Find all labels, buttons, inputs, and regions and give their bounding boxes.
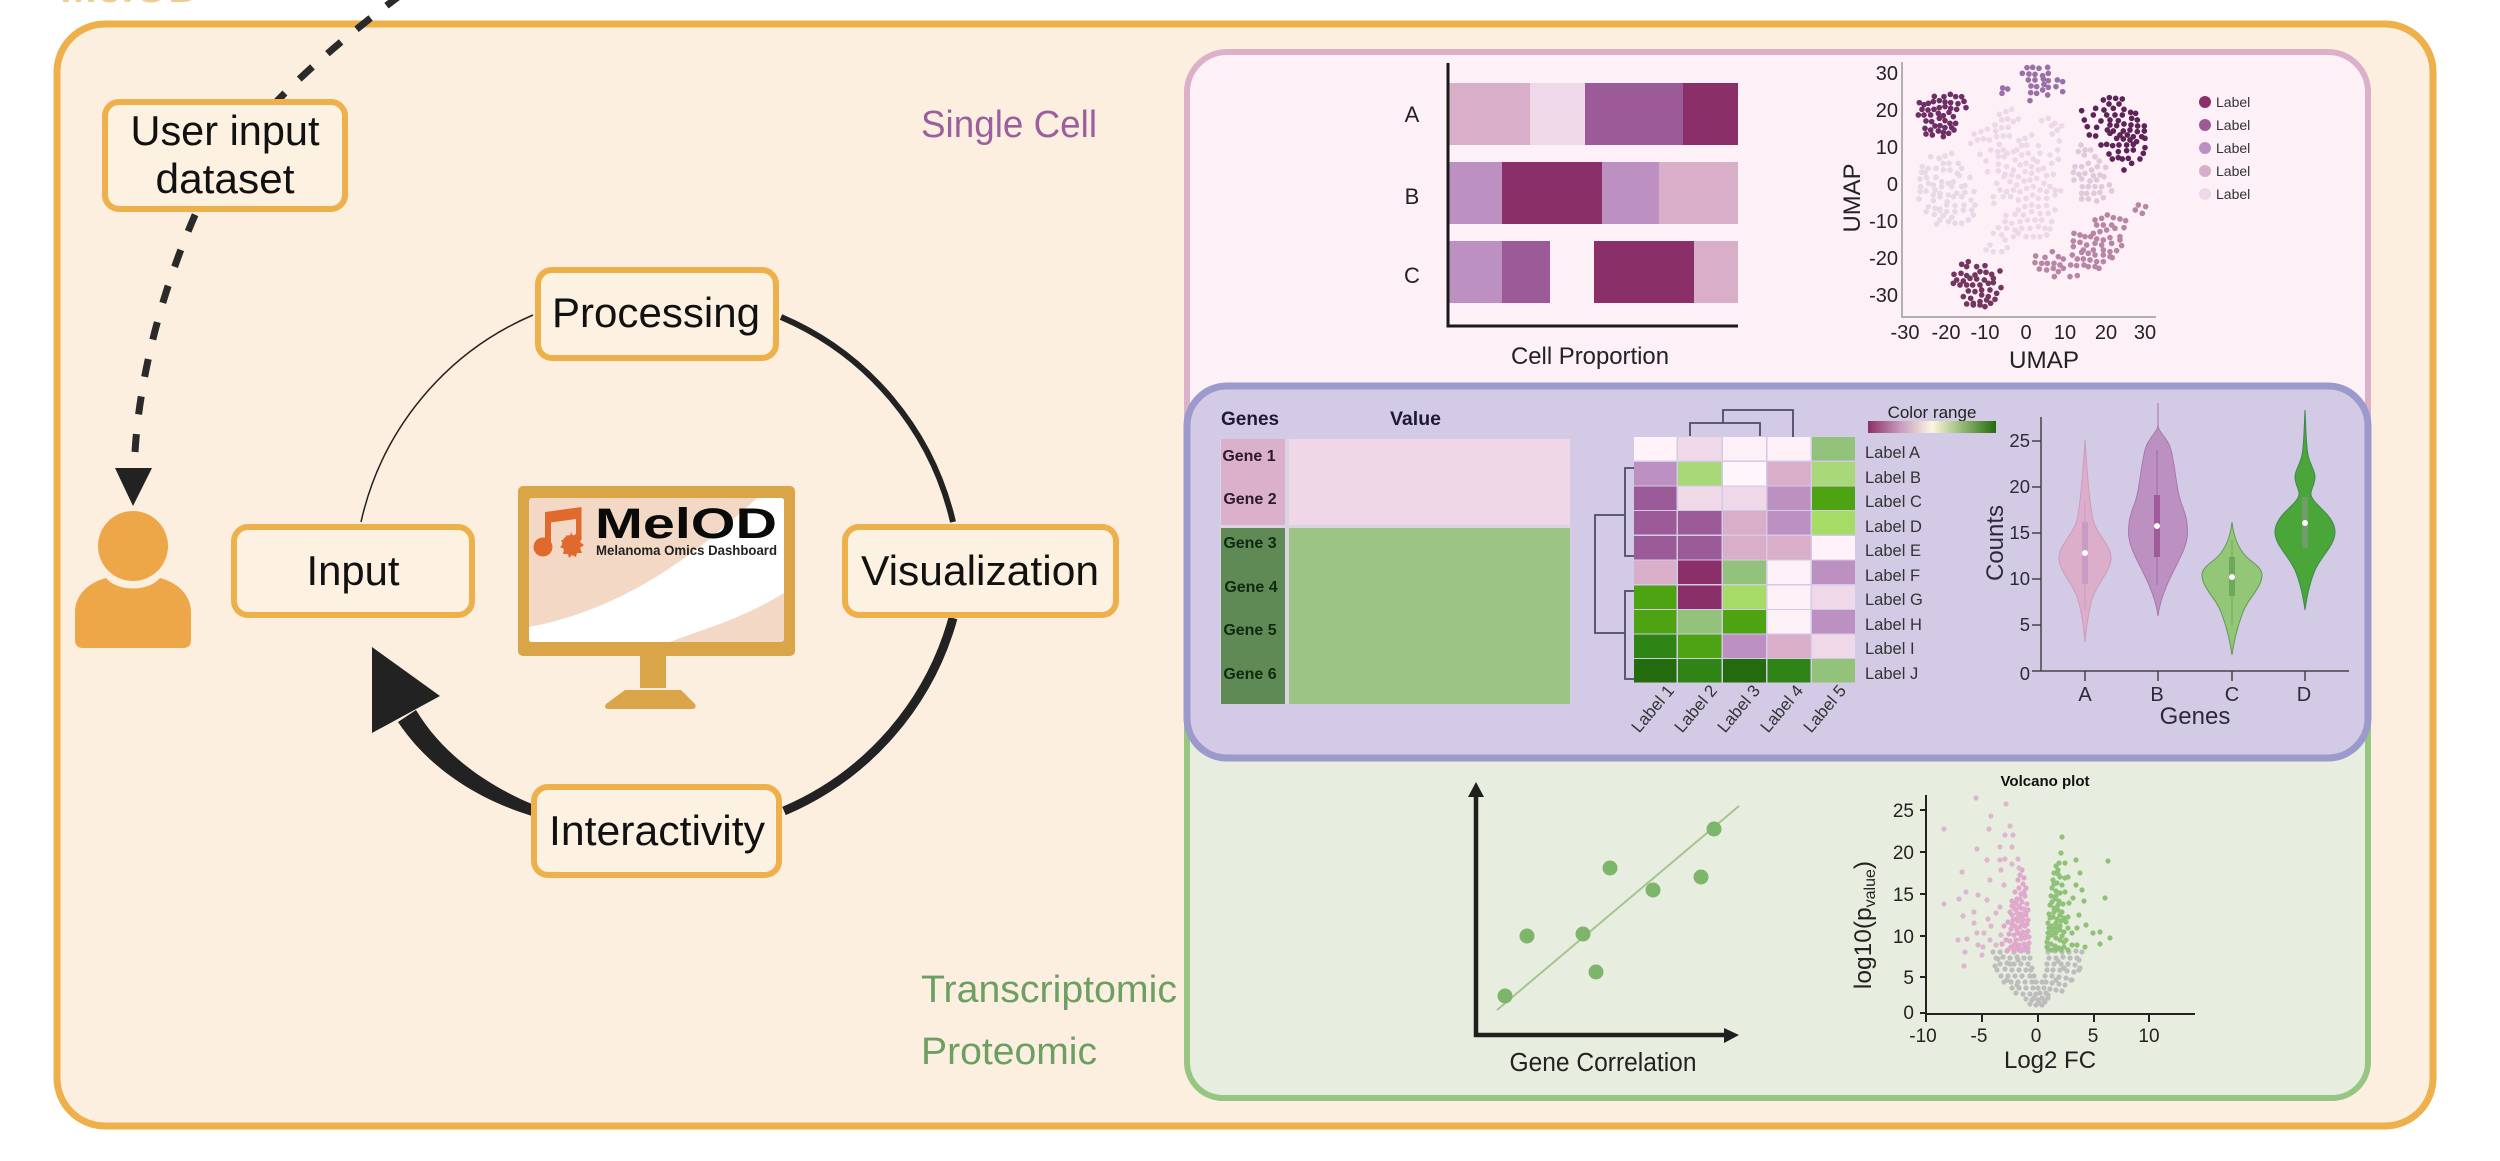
heatmap: column labels: Label 4 — [1757, 681, 1807, 736]
chart: UMAP scatter: -20 — [1932, 322, 1960, 344]
chart: violin plot — [1982, 403, 2349, 730]
heatmap: column labels: Label 3 — [1714, 681, 1764, 736]
chart: UMAP scatter: 20 — [2095, 322, 2117, 344]
heatmap: row labels: Label D — [1865, 518, 1922, 536]
legend: UMAP clusters: Label — [2216, 117, 2250, 133]
panel: single cell — [1187, 52, 2368, 492]
box: input: Input — [306, 547, 400, 594]
chart: volcano plot: Volcano plot — [2000, 773, 2090, 790]
chart: violin plot: 10 — [2009, 568, 2030, 589]
chart: UMAP scatter: -20 — [1869, 248, 1898, 270]
arrow: dashed data path to user — [115, 0, 402, 506]
heatmap: row labels: Label C — [1865, 493, 1922, 511]
box: processing — [538, 270, 776, 358]
heatmap: dendrograms — [1595, 410, 1793, 679]
chart: volcano plot: Log2 FC — [2004, 1047, 2096, 1074]
chart: UMAP scatter: 20 — [1876, 100, 1898, 122]
violin: D — [2275, 410, 2335, 610]
heatmap: column labels: Label 2 — [1671, 681, 1721, 736]
heatmap: row labels: Label F — [1865, 567, 1920, 585]
box: interactivity: Interactivity — [549, 807, 765, 854]
arrow: cycle back to input — [372, 647, 532, 816]
box: visualization — [845, 527, 1116, 615]
chart: volcano plot: 0 — [2031, 1026, 2041, 1047]
chart: UMAP scatter: -10 — [1869, 211, 1898, 233]
legend: UMAP clusters: Label — [2216, 140, 2250, 156]
chart: violin plot: 0 — [2020, 663, 2030, 684]
chart: violin plot: 15 — [2009, 522, 2030, 543]
table: genes and values: Gene 4 — [1224, 579, 1278, 596]
panel: transcriptomic proteomic — [1187, 600, 2368, 1098]
box: visualization: Visualization — [861, 547, 1099, 594]
box: processing: Processing — [552, 289, 760, 336]
heading: proteomic: Proteomic — [921, 1031, 1097, 1073]
table: genes and values — [1220, 408, 1570, 704]
legend: color range: Color range — [1888, 403, 1976, 422]
chart: UMAP scatter: UMAP — [2009, 347, 2079, 374]
violin: A — [2059, 440, 2111, 642]
chart: violin plot: Counts — [1982, 505, 2009, 581]
heatmap: column labels — [1628, 681, 1850, 736]
stacked bar chart: cell proportion: Cell Proportion — [1511, 343, 1669, 370]
chart: volcano plot: log10(p — [1850, 907, 1877, 989]
chart: violin plot: A — [2078, 684, 2092, 706]
box: user input dataset: dataset — [156, 155, 295, 202]
chart: volcano plot: 25 — [1893, 801, 1914, 822]
chart: volcano plot: value — [1862, 869, 1879, 907]
table: genes and values: Genes — [1221, 409, 1279, 430]
table: genes and values: Gene 2 — [1223, 491, 1277, 508]
heatmap: row labels: Label H — [1865, 616, 1922, 634]
chart: gene correlation — [1468, 782, 1739, 1077]
chart: UMAP scatter: 30 — [1876, 63, 1898, 85]
chart: violin plot: B — [2150, 684, 2164, 706]
chart: UMAP scatter — [1839, 62, 2250, 374]
chart: clustered heatmap — [1595, 403, 1996, 736]
chart: volcano plot: 20 — [1893, 843, 1914, 864]
table: genes and values: Value — [1390, 408, 1441, 430]
box: input — [234, 527, 472, 615]
chart: volcano plot: 10 — [1893, 927, 1914, 948]
chart: UMAP scatter: 30 — [2134, 322, 2156, 344]
cycle arcs — [361, 315, 953, 811]
icon: monitor with MelOD logo — [518, 486, 795, 709]
logo: wordmark: MelOD — [595, 500, 777, 548]
chart: volcano plot: 0 — [1903, 1003, 1914, 1024]
legend: color range — [1868, 403, 1996, 433]
chart: volcano plot: -10 — [1909, 1026, 1937, 1047]
chart: volcano plot: ) — [1850, 861, 1877, 869]
violin: C — [2202, 522, 2262, 655]
heatmap: row labels: Label B — [1865, 469, 1921, 487]
stacked bar chart: cell proportion: C — [1404, 263, 1420, 288]
legend: UMAP clusters: Label — [2216, 186, 2250, 202]
chart: UMAP scatter: 0 — [1887, 174, 1898, 196]
table: genes and values: Gene 5 — [1223, 622, 1277, 639]
box: user input dataset: User input — [130, 107, 320, 154]
chart: violin plot: D — [2297, 684, 2311, 706]
logo: music note — [534, 507, 584, 558]
chart: UMAP scatter: 10 — [1876, 137, 1898, 159]
violin: B — [2128, 403, 2188, 616]
chart: UMAP scatter: UMAP — [1839, 164, 1866, 232]
chart: volcano plot: 5 — [1903, 968, 1914, 989]
heading: transcriptomic: Transcriptomic — [921, 969, 1177, 1011]
chart: UMAP scatter: -30 — [1891, 322, 1919, 344]
chart: UMAP scatter: -30 — [1869, 285, 1898, 307]
heatmap: row labels: Label I — [1865, 640, 1915, 658]
chart: volcano plot: 5 — [2088, 1026, 2098, 1047]
chart: UMAP scatter: -10 — [1971, 322, 1999, 344]
icon: user — [75, 511, 191, 648]
chart: volcano plot: 10 — [2138, 1026, 2160, 1047]
heading: single cell: Single Cell — [921, 104, 1097, 146]
box: interactivity — [534, 787, 779, 875]
heatmap: row labels: Label G — [1865, 591, 1923, 609]
table: genes and values: Gene 1 — [1222, 448, 1276, 465]
heatmap: row labels — [1865, 444, 1923, 683]
heatmap: column labels: Label 1 — [1628, 681, 1678, 736]
heatmap: column labels: Label 5 — [1800, 681, 1850, 736]
legend: UMAP clusters — [2199, 94, 2250, 202]
chart: violin plot: C — [2225, 684, 2239, 706]
chart: volcano plot: 15 — [1893, 885, 1914, 906]
chart: gene correlation: Gene Correlation — [1510, 1049, 1696, 1077]
legend: UMAP clusters: Label — [2216, 163, 2250, 179]
chart: violin plot: 25 — [2009, 430, 2030, 451]
chart: violin plot: Genes — [2160, 703, 2230, 730]
chart: volcano plot — [1850, 773, 2195, 1074]
chart: violin plot: 20 — [2009, 476, 2030, 497]
heatmap: row labels: Label A — [1865, 444, 1920, 462]
chart: volcano plot: -5 — [1971, 1026, 1987, 1047]
table: genes and values: Gene 3 — [1223, 535, 1277, 552]
logo: tagline: Melanoma Omics Dashboard — [596, 542, 777, 558]
legend: UMAP clusters: Label — [2216, 94, 2250, 110]
stacked bar chart: cell proportion — [1404, 63, 1738, 370]
panel: shared omics — [1187, 386, 2368, 758]
heatmap: row labels: Label E — [1865, 542, 1921, 560]
box: user input dataset — [105, 102, 345, 209]
stacked bar chart: cell proportion: A — [1405, 102, 1420, 127]
chart: violin plot: 5 — [2020, 614, 2030, 635]
heatmap: cells — [1634, 437, 1855, 682]
chart: UMAP scatter: 10 — [2054, 322, 2076, 344]
table: genes and values: Gene 6 — [1223, 666, 1277, 683]
heatmap: row labels: Label J — [1865, 665, 1918, 683]
chart: UMAP scatter: 0 — [2020, 322, 2032, 344]
stacked bar chart: cell proportion: B — [1405, 184, 1419, 209]
